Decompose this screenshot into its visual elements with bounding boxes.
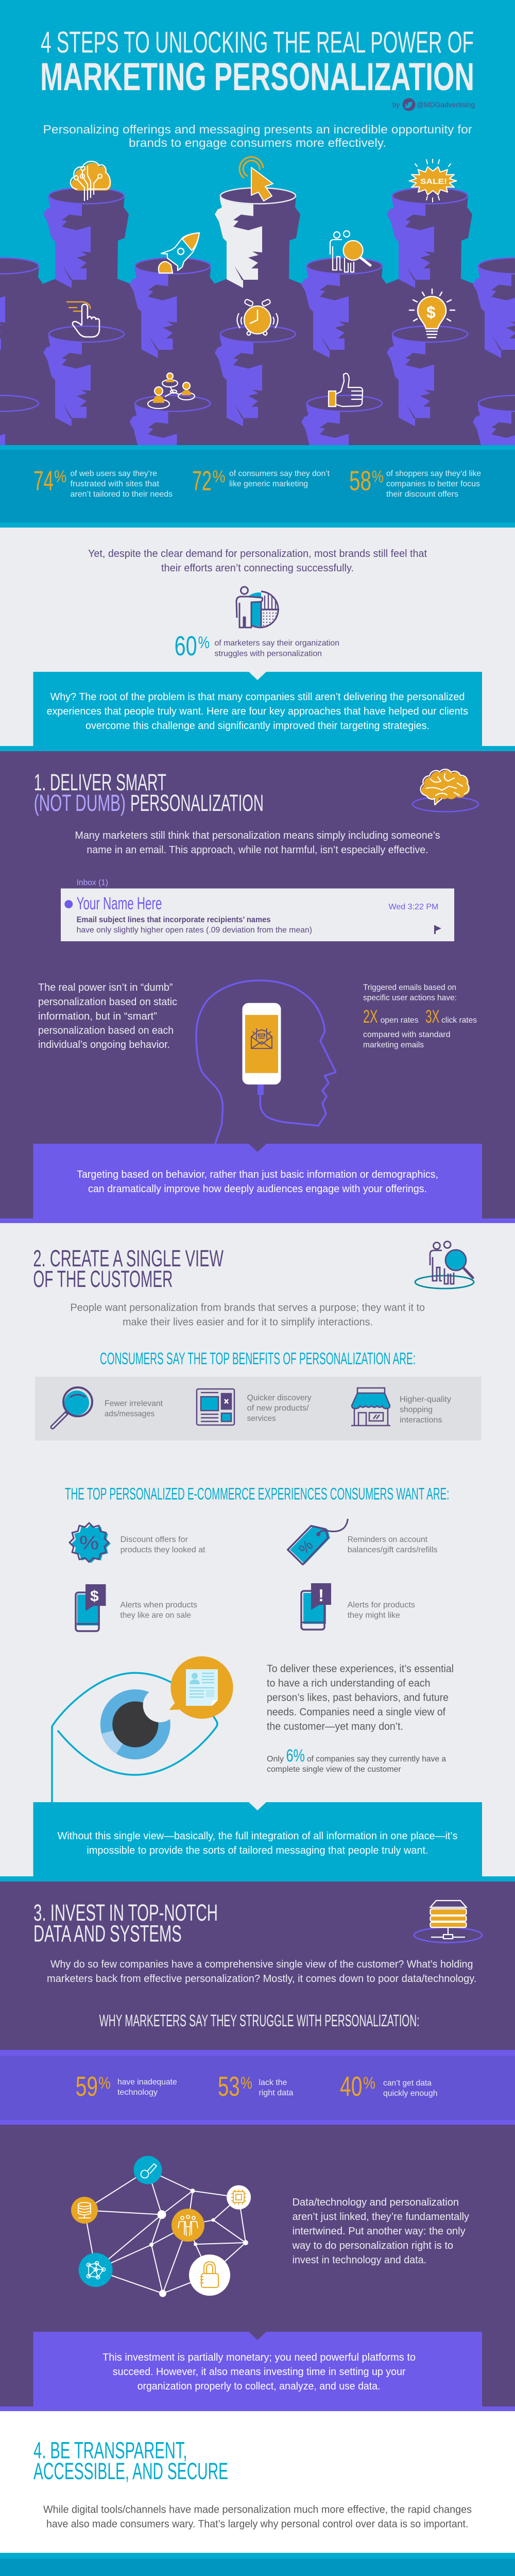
callout: targeting: can dramatically improve how deeply audiences engage with your offerings.	[88, 1183, 427, 1195]
illustration: head with phone	[196, 980, 336, 1144]
stat: 53%	[218, 2071, 294, 2102]
heading: step 3	[33, 1900, 218, 1946]
stat: 59%: 59	[76, 2071, 98, 2102]
stat: 6%: Only	[267, 1755, 284, 1764]
icon: cursor	[239, 157, 273, 201]
icon: price tag	[288, 1519, 348, 1565]
heading: step 4: 4. BE TRANSPARENT,	[33, 2437, 187, 2464]
icon: rocket	[159, 233, 199, 273]
intro text: Personalizing offerings and messaging presents an incredible opportunity for	[43, 123, 472, 136]
stat: 59%: technology	[117, 2088, 158, 2097]
text: reminders: Reminders on account	[348, 1535, 428, 1544]
text: fewer irrelevant: ads/messages	[105, 1410, 154, 1418]
stat: 53%: right data	[259, 2089, 294, 2097]
text: rich understanding: to have a rich understanding of each	[267, 1677, 431, 1689]
icon: cloud brain	[71, 161, 111, 201]
text: intertwined: intertwined. Put another way: the only	[293, 2225, 466, 2237]
text: real power: information, but in “smart”	[38, 1010, 157, 1022]
heading: step 3: 3. INVEST IN TOP-NOTCH	[33, 1900, 218, 1926]
stat: 6%: of companies say they currently have a	[307, 1755, 446, 1764]
stat: 58%: %	[372, 467, 384, 486]
stat: 58%: their discount offers	[386, 490, 458, 499]
icon: store	[351, 1388, 390, 1426]
heading: step 2: 2. CREATE A SINGLE VIEW	[33, 1245, 224, 1272]
stat: 74%: aren’t tailored to their needs	[70, 490, 173, 499]
stat: 40%: %	[363, 2074, 375, 2092]
panel: benefits	[35, 1377, 481, 1440]
text: triggered emails stat: marketing emails	[363, 1041, 424, 1049]
text: real power	[38, 981, 177, 1050]
callout: why: Why? The root of the problem is that many companies still aren’t delivering the personalized	[50, 691, 465, 703]
text: alerts on sale	[120, 1601, 197, 1620]
stat: 60% of marketers: 60	[175, 631, 197, 662]
icon: tapping hand	[66, 302, 99, 337]
icon: price tag: %	[296, 1537, 316, 1557]
stat: 58%	[349, 466, 481, 499]
icon: sale burst	[409, 159, 456, 202]
text: real power: personalization based on static	[38, 996, 177, 1008]
icon: people network	[148, 373, 195, 409]
text: discount offers: Discount offers for	[121, 1535, 188, 1544]
icon: newspaper	[197, 1389, 234, 1425]
stat: 72%: 72	[192, 466, 212, 497]
stat: 58%: companies to better focus	[386, 480, 480, 488]
heading: step 4	[33, 2437, 228, 2484]
callout: single view: impossible to provide the sorts of tailored messaging that people truly want.	[87, 1844, 428, 1856]
stat: 6%	[267, 1746, 446, 1774]
callout: targeting: Targeting based on behavior, rather than just basic information or demographics,	[77, 1168, 438, 1180]
panel: step 1	[0, 751, 515, 1223]
stat: 40%: quickly enough	[383, 2089, 438, 2098]
node: people	[171, 2209, 204, 2242]
text: real power: individual’s ongoing behavior.	[38, 1039, 170, 1050]
illustration: eye with speech bubble	[52, 1656, 233, 1802]
text: step 2 intro	[70, 1302, 425, 1328]
byline: by	[392, 100, 400, 109]
text: step 4 intro: have also made consumers wary. That’s largely why personal control over data is so important.	[46, 2518, 468, 2530]
icon: people search	[330, 231, 370, 272]
icon: phone sale alert	[76, 1584, 106, 1631]
icon: magnifier	[53, 1387, 92, 1427]
node: key	[134, 2156, 162, 2184]
text: step 3 intro: marketers back from effective personalization? Mostly, it comes down to poor data/technology.	[47, 1973, 476, 1985]
text: discount offers	[121, 1535, 205, 1554]
text: intertwined: invest in technology and data.	[293, 2254, 426, 2266]
stat: 6%: complete single view of the customer	[267, 1765, 401, 1774]
text: alerts on sale: they like are on sale	[120, 1611, 191, 1620]
icon: alarm clock	[237, 299, 278, 335]
text: demand intro: Yet, despite the clear demand for personalization, most brands still feel that	[88, 548, 427, 560]
intro text	[43, 123, 472, 149]
callout: investment: This investment is partially monetary; you need powerful platforms to	[102, 2351, 416, 2363]
text: reminders	[348, 1535, 438, 1554]
stat: 58%: 58	[349, 466, 371, 497]
text: intertwined: way to do personalization right is to	[292, 2240, 453, 2251]
stat: 72%	[192, 466, 330, 497]
heading: step 1: (NOT DUMB)	[34, 790, 126, 816]
stat: 60% of marketers: of marketers say their organization	[214, 639, 339, 648]
heading: step 1	[34, 769, 264, 816]
text: intertwined: aren’t just linked, they’re fundamentally	[293, 2211, 470, 2223]
callout: why	[33, 672, 482, 751]
text: demand intro: their efforts aren’t connecting successfully.	[161, 562, 354, 574]
text: step 1 intro: Many marketers still think that personalization means simply including someone’s	[75, 829, 440, 841]
text: step 4 intro: While digital tools/channels have made personalization much more effective, the rapid changes	[43, 2504, 472, 2515]
panel: hero	[0, 0, 515, 528]
heading: step 2: OF THE CUSTOMER	[33, 1266, 173, 1292]
text: rich understanding: person’s likes, past behaviors, and future	[267, 1692, 449, 1703]
stats band	[0, 445, 515, 528]
text: triggered emails stat: compared with standard	[363, 1030, 450, 1039]
icon: person with pie chart	[236, 587, 279, 628]
node: chip	[227, 2185, 251, 2209]
stat: 40%	[340, 2071, 438, 2102]
text: step 3 intro	[47, 1958, 476, 1985]
text: real power: personalization based on each	[38, 1024, 174, 1037]
text: fewer irrelevant	[105, 1399, 163, 1418]
stat: 74%	[33, 466, 173, 499]
stat: 72%: %	[213, 467, 226, 486]
text: rich understanding: needs. Companies need a single view of	[267, 1706, 445, 1718]
text: alerts might like: Alerts for products	[348, 1601, 415, 1609]
text: discount offers: products they looked at	[121, 1546, 205, 1554]
email inbox mockup: Inbox (1)	[77, 878, 108, 887]
text: triggered emails stat: open rates	[381, 1016, 419, 1025]
text: reminders: balances/gift cards/refills	[348, 1546, 438, 1554]
text: higher quality: shopping	[400, 1405, 433, 1414]
stat: 53%: 53	[218, 2071, 240, 2102]
callout: investment: succeed. However, it also means investing time in setting up your	[113, 2366, 406, 2378]
node: lock	[189, 2255, 230, 2296]
node: database	[71, 2197, 98, 2224]
panel: step 3	[0, 1882, 515, 2411]
heading: step 1: PERSONALIZATION	[130, 790, 264, 816]
text: quicker discovery: services	[247, 1414, 276, 1423]
callout: why: overcome this challenge and significantly improved their targeting strategies.	[85, 720, 430, 732]
icon: brain	[413, 769, 478, 812]
stat: 59%: %	[98, 2074, 111, 2092]
stat: 60% of marketers: %	[198, 633, 210, 652]
text: alerts might like	[348, 1601, 415, 1620]
byline: @MDGadvertising	[417, 100, 475, 109]
stat: 60% of marketers	[175, 631, 339, 662]
text: higher quality: interactions	[400, 1416, 442, 1425]
intro text: brands to engage consumers more effectively.	[129, 136, 386, 149]
text: real power: The real power isn’t in “dumb”	[38, 981, 173, 993]
text: step 4 intro	[43, 2504, 472, 2530]
icon: lightbulb with dollar: $	[426, 303, 436, 321]
icon: envelope	[251, 1028, 272, 1048]
panel: struggling brands	[0, 548, 515, 751]
icon: lightbulb with dollar	[409, 289, 455, 337]
text: higher quality	[400, 1395, 451, 1425]
illustration: data network	[71, 2156, 251, 2297]
text: step 1 intro: name in an email. This approach, while not harmful, isn’t especially effective.	[87, 844, 428, 856]
text: triggered emails stat: Triggered emails based on	[363, 984, 456, 992]
stat: 53%: lack the	[259, 2078, 287, 2087]
stat: 72%: like generic marketing	[229, 480, 308, 488]
text: step 2 intro: make their lives easier and for it to simplify interactions.	[123, 1316, 373, 1328]
email inbox mockup: Your Name Here	[77, 894, 162, 913]
stat: 74%: frustrated with sites that	[70, 480, 160, 488]
title	[40, 26, 474, 99]
illustration: rows of heads	[0, 188, 515, 537]
text: triggered emails stat: click rates	[441, 1016, 477, 1025]
text: higher quality: Higher-quality	[400, 1395, 451, 1404]
stats band: control	[0, 2553, 515, 2576]
icon: people search teal	[415, 1242, 474, 1289]
text: rich understanding: To deliver these experiences, it’s essential	[267, 1663, 454, 1674]
heading: step 4: ACCESSIBLE, AND SECURE	[33, 2458, 228, 2484]
callout: investment	[33, 2332, 482, 2411]
node: network	[79, 2253, 113, 2287]
callout: investment: organization properly to collect, analyze, and use data.	[138, 2380, 380, 2392]
heading: step 1: 1. DELIVER SMART	[34, 769, 166, 795]
stat: 40%: can’t get data	[383, 2079, 432, 2088]
heading: step 3: DATA AND SYSTEMS	[33, 1921, 182, 1946]
email inbox mockup: Email subject lines that incorporate recipients’ names	[77, 916, 271, 924]
callout: single view: Without this single view—basically, the full integration of all information in one place—it’s	[58, 1830, 457, 1842]
text: step 1 intro	[75, 829, 440, 856]
email inbox mockup: have only slightly higher open rates (.09 deviation from the mean)	[77, 926, 312, 935]
text: quicker discovery: of new products/	[247, 1404, 309, 1413]
stat: 74%: of web users say they’re	[70, 469, 157, 478]
panel: step 4	[0, 2411, 515, 2576]
icon: phone product alert	[301, 1583, 331, 1630]
text: quicker discovery	[247, 1394, 312, 1423]
byline	[392, 98, 475, 111]
text: step 2 intro: People want personalization from brands that serves a purpose; they want it to	[70, 1302, 425, 1314]
icon: server	[414, 1901, 482, 1942]
stat: 60% of marketers: struggles with personalization	[214, 649, 322, 658]
callout: why: experiences that people truly want. Here are four key approaches that have helped our clients	[47, 705, 468, 717]
text: triggered emails stat	[363, 984, 477, 1049]
icon: phone product alert: !	[318, 1586, 324, 1605]
email inbox mockup	[61, 878, 454, 941]
stat: 59%: have inadequate	[117, 2078, 177, 2087]
text: rich understanding	[267, 1663, 454, 1732]
callout: single view	[33, 1802, 482, 1882]
stats band: struggle	[0, 2050, 515, 2125]
heading: step 2	[33, 1245, 224, 1292]
text: step 3 intro: Why do so few companies have a comprehensive single view of the customer? What’s holding	[50, 1958, 473, 1970]
text: triggered emails stat: 3X	[425, 1007, 440, 1027]
text: quicker discovery: Quicker discovery	[247, 1394, 312, 1402]
stat: 74%: %	[54, 467, 67, 486]
stat: 6%: 6%	[286, 1746, 305, 1766]
stat: 72%: of consumers say they don’t	[229, 469, 330, 478]
icon: thumbs up	[329, 374, 363, 406]
icon: sale burst: SALE!	[420, 177, 447, 186]
email inbox mockup: Wed 3:22 PM	[388, 903, 438, 911]
text: triggered emails stat: 2X	[363, 1007, 378, 1027]
text: fewer irrelevant: Fewer irrelevant	[105, 1399, 163, 1408]
stat: 58%: of shoppers say they’d like	[386, 469, 481, 478]
text: intertwined	[292, 2196, 470, 2266]
icon: phone sale alert: $	[90, 1588, 99, 1605]
stat: 40%: 40	[340, 2071, 362, 2102]
stat: 59%	[76, 2071, 177, 2102]
text: intertwined: Data/technology and personalization	[293, 2196, 459, 2208]
callout: targeting	[33, 1144, 482, 1223]
icon: discount badge	[70, 1523, 111, 1563]
panel: step 2	[0, 1241, 515, 1882]
stat: 53%: %	[241, 2074, 252, 2092]
stat: 74%: 74	[33, 466, 54, 497]
text: rich understanding: the customer—yet many don’t.	[267, 1721, 403, 1732]
text: triggered emails stat: specific user actions have:	[363, 994, 457, 1003]
text: alerts might like: they might like	[348, 1611, 400, 1620]
text: alerts on sale: Alerts when products	[120, 1601, 197, 1609]
text: demand intro	[88, 548, 427, 574]
icon: discount badge: %	[79, 1532, 99, 1554]
